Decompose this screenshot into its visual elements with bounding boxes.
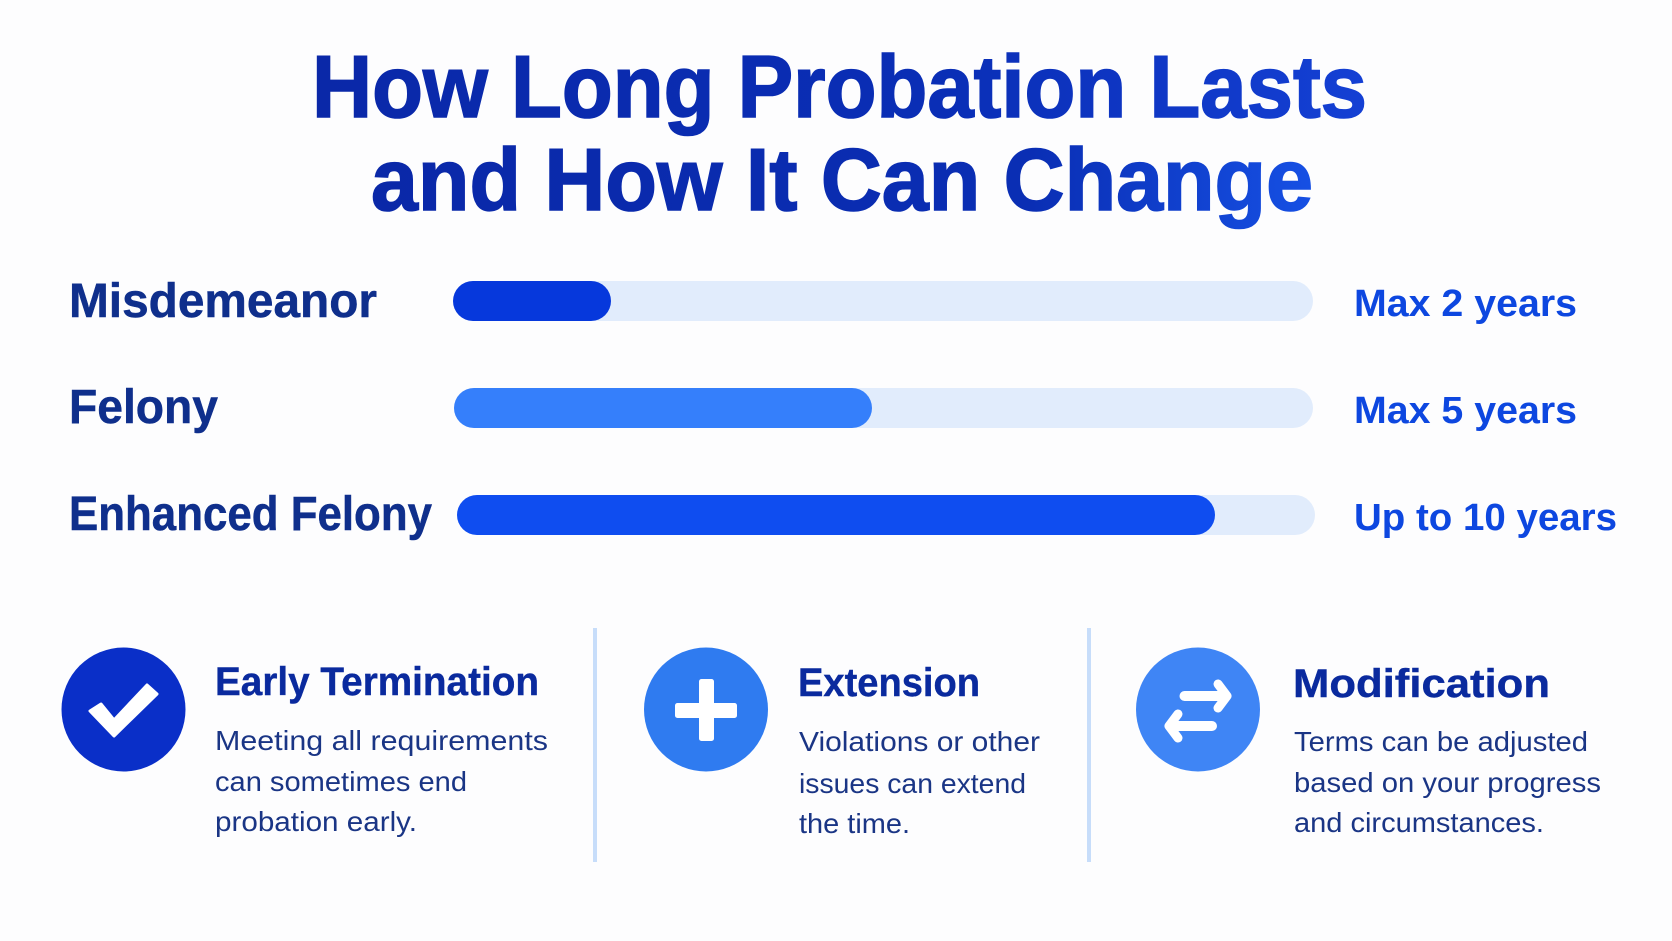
label: felony: Felony: [69, 381, 218, 434]
value: up to 10 years: Up to 10 years: [1354, 497, 1617, 539]
heading: modification: Modification: [1293, 662, 1550, 706]
panel: early termination: [62, 648, 548, 837]
text: extension description: Violations or other: [799, 726, 1040, 757]
heading: extension: Extension: [798, 661, 980, 705]
text: early termination description: probation early.: [215, 806, 417, 837]
bar track: misdemeanor: [453, 281, 1313, 321]
row: misdemeanor duration: [69, 275, 1577, 328]
title: How Long Probation Lasts: [312, 37, 1367, 136]
text: early termination description: Meeting all requirements: [215, 725, 548, 756]
text: modification description: [1294, 726, 1601, 838]
bar fill: misdemeanor: [453, 281, 611, 321]
text: extension description: [799, 726, 1040, 839]
title: and How It Can Change: [371, 130, 1313, 229]
icon: check mark: [62, 648, 186, 772]
row: felony duration: [69, 381, 1577, 434]
text: modification description: and circumstances.: [1294, 807, 1544, 838]
bar track: enhanced felony: [457, 495, 1315, 535]
value: max 2 years: Max 2 years: [1354, 283, 1577, 325]
icon: plus: [644, 648, 768, 772]
label: enhanced felony: Enhanced Felony: [69, 488, 432, 541]
text: modification description: based on your progress: [1294, 767, 1601, 798]
row: enhanced felony duration: [69, 488, 1617, 541]
bar fill: felony: [454, 388, 872, 428]
value: max 5 years: Max 5 years: [1354, 390, 1577, 432]
label: misdemeanor: Misdemeanor: [69, 275, 377, 328]
bar track: felony: [454, 388, 1313, 428]
panel: extension: [644, 648, 1040, 839]
text: early termination description: can sometimes end: [215, 766, 467, 797]
panel: modification: [1136, 648, 1601, 838]
title: [312, 37, 1367, 229]
text: extension description: issues can extend: [799, 768, 1026, 799]
text: modification description: Terms can be adjusted: [1294, 726, 1588, 757]
text: early termination description: [215, 725, 548, 837]
icon: swap arrows: [1136, 648, 1260, 772]
heading: early termination: Early Termination: [215, 660, 539, 704]
text: extension description: the time.: [799, 808, 910, 839]
bar fill: enhanced felony: [457, 495, 1215, 535]
